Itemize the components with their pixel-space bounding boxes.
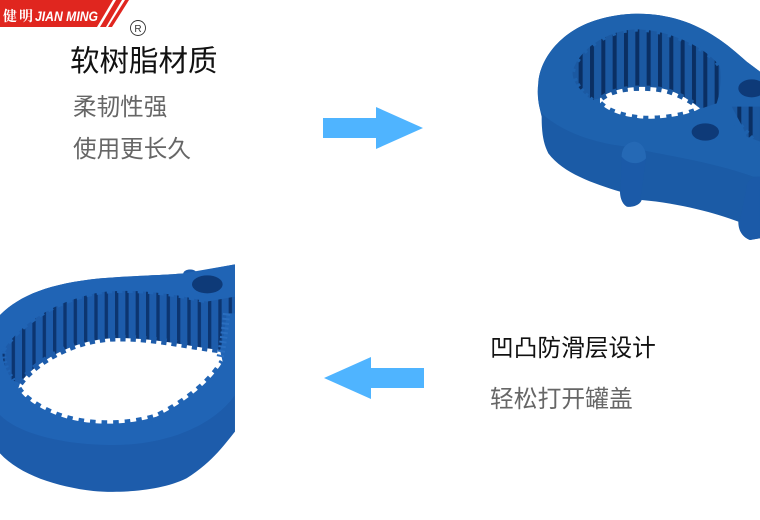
arrow: pointing right [323, 107, 423, 149]
logo: Jian Ming brand: JIAN MING [35, 8, 98, 24]
text block: material benefits: 柔韧性强 [73, 95, 167, 121]
text block: material benefits: 使用更长久 [73, 137, 191, 163]
inner wall [2, 291, 235, 383]
icon: registered trademark [130, 20, 146, 36]
heading: anti-slip design: 凹凸防滑层设计 [490, 336, 656, 362]
text block: material benefits [73, 94, 191, 163]
product photo: wrench top right [538, 14, 760, 240]
inner wall [573, 29, 721, 108]
logo: Jian Ming brand: 明 [19, 6, 33, 26]
central hole [600, 87, 700, 119]
logo: Jian Ming brand: 健 [3, 6, 17, 26]
product photo: wrench bottom left [0, 264, 235, 492]
hole small [692, 123, 719, 141]
logo: Jian Ming brand [0, 0, 129, 27]
central opening [18, 338, 223, 424]
arrow: pointing left [324, 357, 424, 399]
text block: easy opening: 轻松打开罐盖 [490, 386, 633, 413]
grip bumps [621, 142, 646, 207]
heading: soft resin material: 软树脂材质 [70, 45, 218, 78]
second gear opening [720, 100, 760, 147]
icon: registered trademark: R [134, 24, 142, 35]
hole [192, 275, 223, 293]
